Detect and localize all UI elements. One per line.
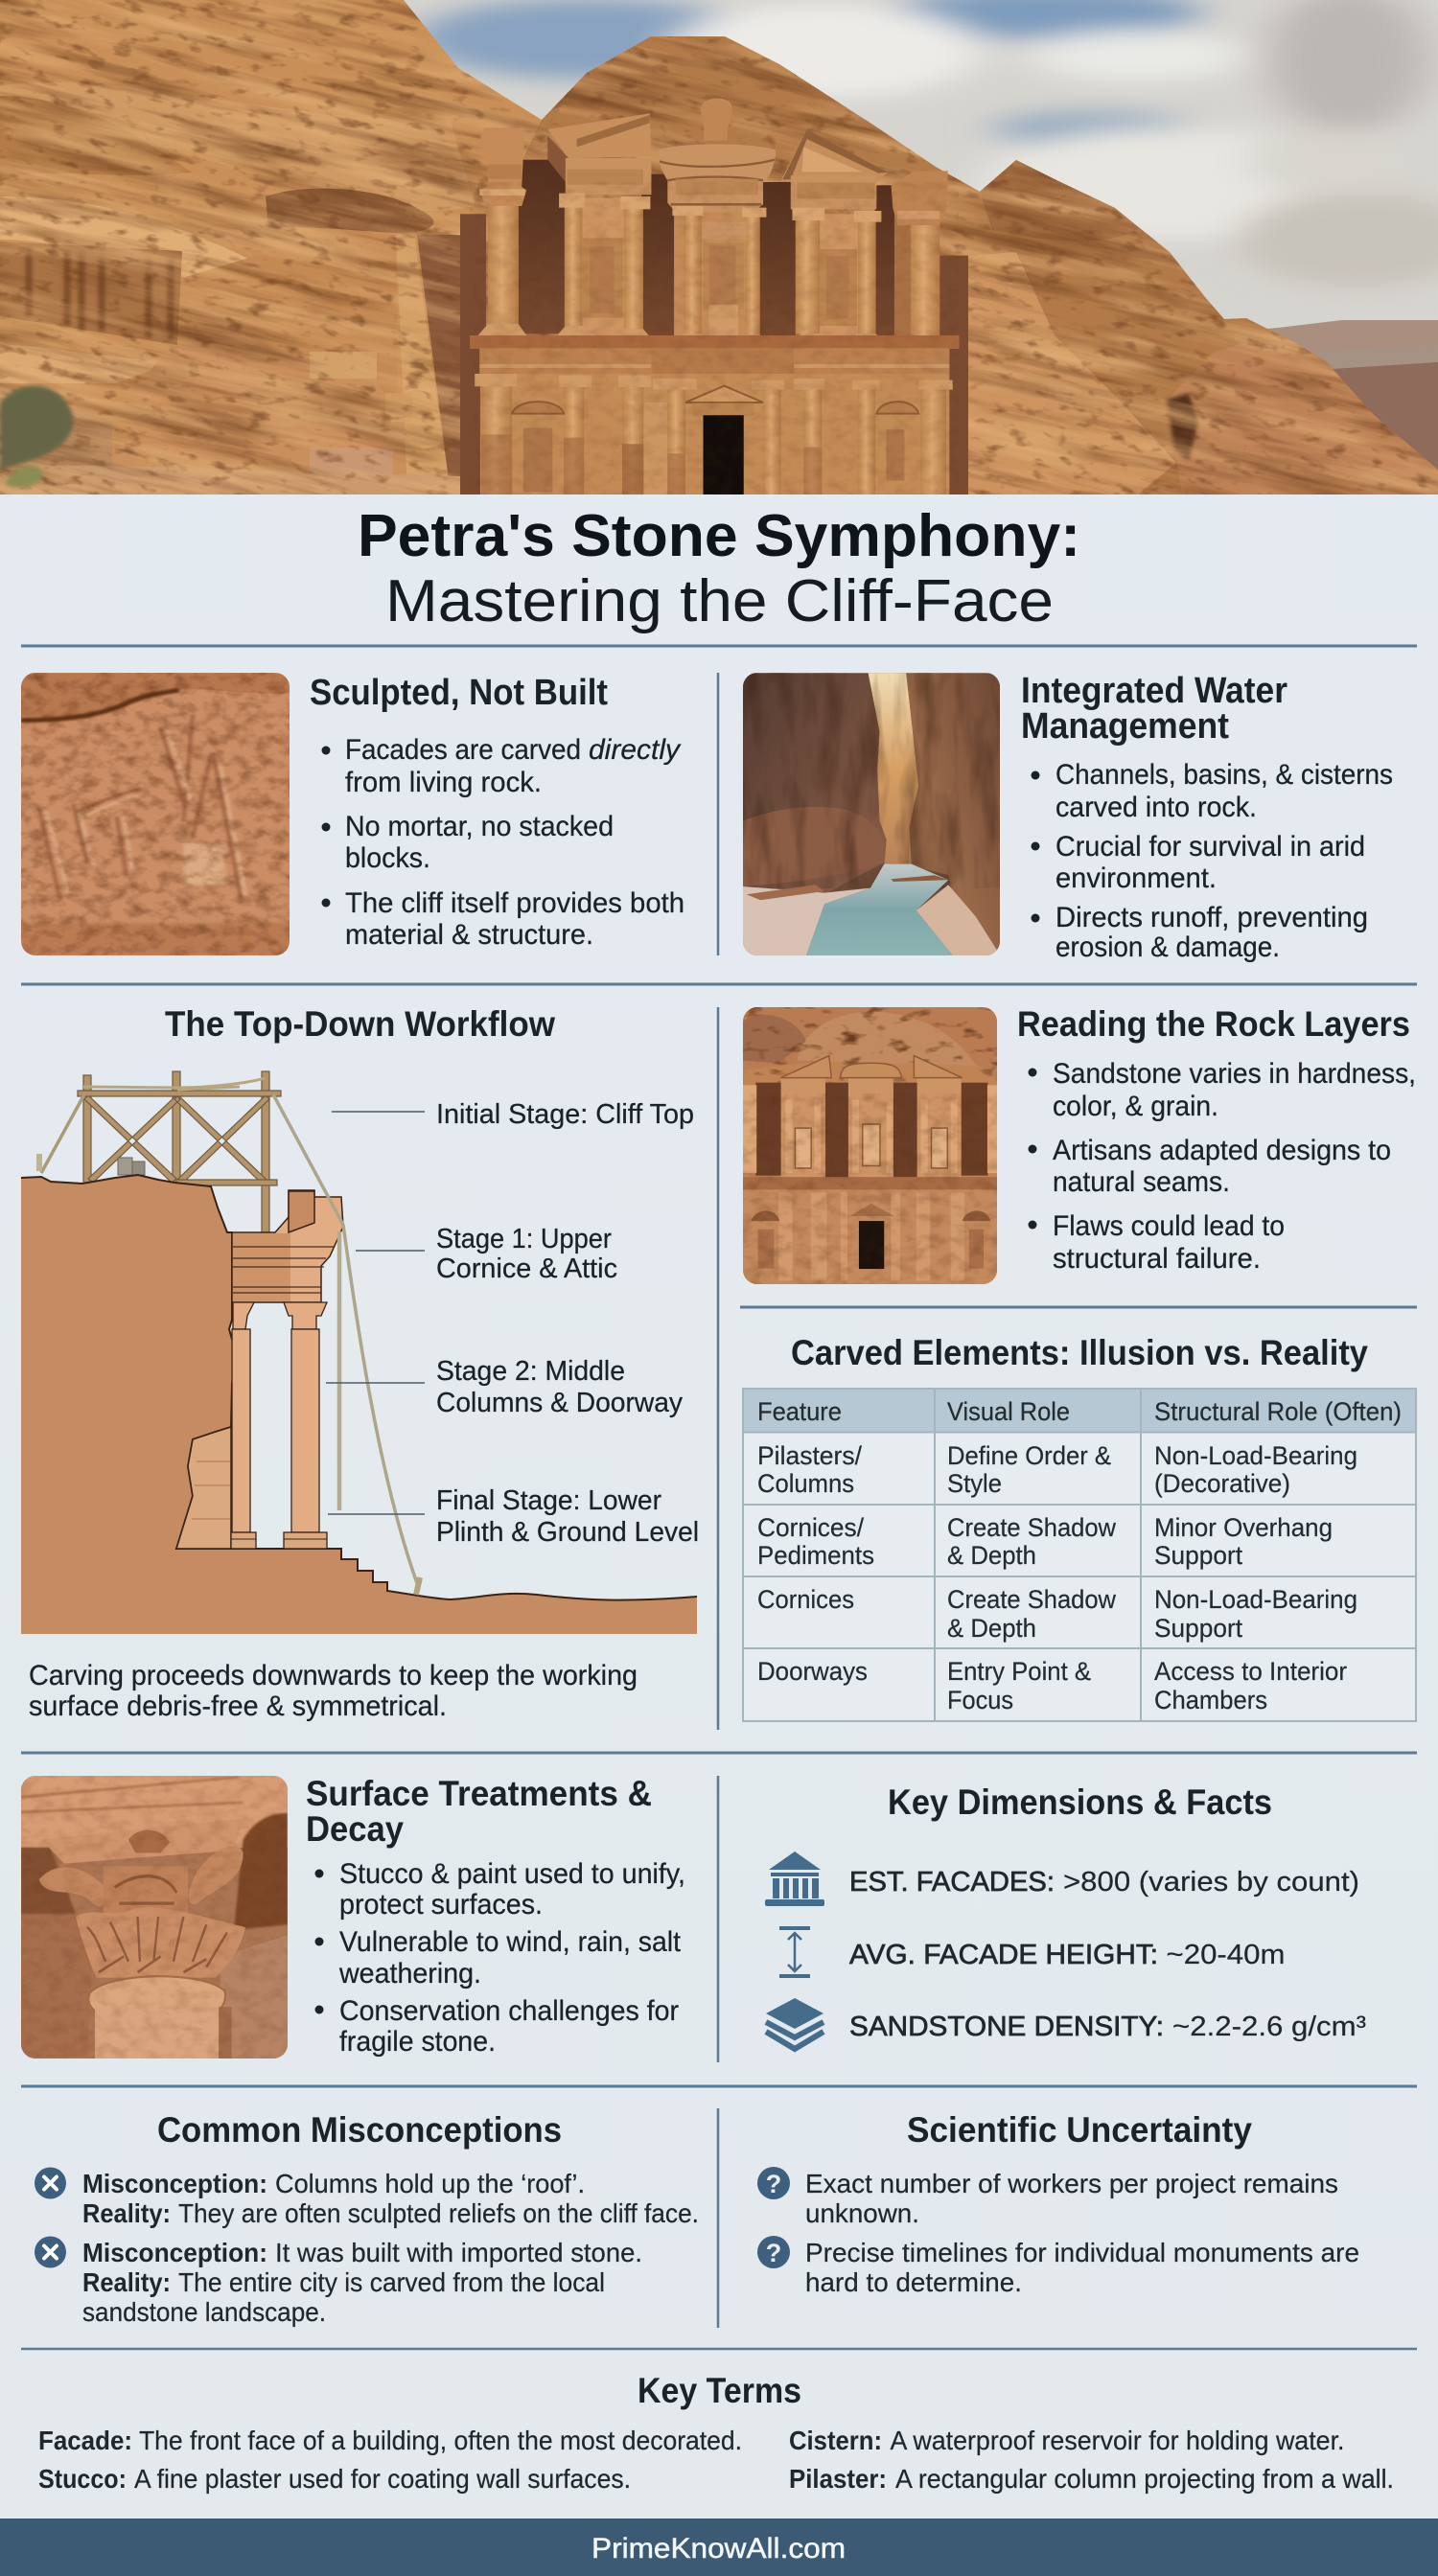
bullets xyxy=(322,734,684,951)
diagram: cliff cross-section with scaffold xyxy=(21,1071,697,1634)
term: pilaster: Pilaster: xyxy=(789,2464,887,2494)
footer bar xyxy=(0,2518,1438,2576)
lower columns xyxy=(481,385,512,494)
icon: question mark xyxy=(757,2167,790,2199)
heading: Carved Elements: Illusion vs. Reality xyxy=(791,1333,1368,1372)
bullets: natural seams. xyxy=(1053,1166,1230,1198)
panel: surface treatments and decay xyxy=(21,1774,685,2059)
uncertainty two: Precise timelines for individual monuments are xyxy=(805,2238,1359,2267)
bullets: Vulnerable to wind, rain, salt xyxy=(339,1926,682,1958)
bullets: Channels, basins, & cisterns xyxy=(1055,759,1393,791)
panel: carved elements table xyxy=(743,1333,1416,1721)
table: Doorways xyxy=(757,1657,868,1686)
panel: scientific uncertainty xyxy=(757,2110,1359,2297)
stage labels: Stage 2: Middle xyxy=(436,1356,625,1387)
panel: reading the rock layers xyxy=(743,1004,1416,1285)
bullets: color, & grain. xyxy=(1053,1091,1218,1122)
term: cistern: Cistern: xyxy=(789,2426,882,2455)
term: facade: Facade: xyxy=(38,2426,132,2455)
table: Chambers xyxy=(1154,1686,1267,1714)
bullets: blocks. xyxy=(345,842,430,874)
table: Entry Point & xyxy=(947,1657,1091,1686)
table: Access to Interior xyxy=(1154,1657,1347,1686)
fact: sandstone density xyxy=(849,2012,1366,2042)
fact: average facade height: AVG. FACADE HEIGHT: xyxy=(849,1940,1158,1970)
stage labels: Final Stage: Lower xyxy=(436,1485,661,1516)
bullets: weathering. xyxy=(338,1958,481,1990)
table: Pilasters/ xyxy=(757,1441,862,1470)
distant hills xyxy=(1267,320,1438,369)
misconception one: Misconception: xyxy=(82,2169,267,2198)
photo: corinthian capital xyxy=(21,1776,288,2059)
fact: estimated facades: EST. FACADES: xyxy=(849,1867,1055,1898)
misconception two: Misconception: xyxy=(82,2238,267,2267)
upper storey walls xyxy=(580,198,625,335)
table: Minor Overhang xyxy=(1154,1513,1333,1542)
term: stucco: Stucco: xyxy=(38,2464,127,2494)
bullets: structural failure. xyxy=(1053,1243,1261,1275)
bullets xyxy=(1028,1058,1416,1275)
caption: Carving proceeds downwards to keep the working xyxy=(29,1660,638,1691)
icon: question mark xyxy=(757,2236,790,2268)
heading: The Top-Down Workflow xyxy=(165,1004,555,1044)
heading: Management xyxy=(1021,706,1229,747)
term: pilaster: A rectangular column projecting from a wall. xyxy=(895,2464,1394,2494)
misconception one: They are often sculpted reliefs on the cliff face. xyxy=(178,2198,699,2228)
icon: temple xyxy=(765,1852,824,1906)
panel: sculpted, not built xyxy=(21,673,684,955)
table: Support xyxy=(1154,1541,1242,1570)
bullets: The cliff itself provides both xyxy=(345,887,684,919)
shadow recesses xyxy=(460,214,486,495)
uncertainty two xyxy=(805,2238,1359,2297)
bullets: Crucial for survival in arid xyxy=(1055,831,1365,862)
table: Support xyxy=(1154,1614,1242,1643)
table: (Decorative) xyxy=(1154,1469,1290,1498)
caption xyxy=(29,1660,638,1722)
misconception two: The entire city is carved from the local xyxy=(178,2267,605,2297)
bullets: Stucco & paint used to unify, xyxy=(339,1858,685,1890)
bullets xyxy=(314,1858,685,2058)
icon: question mark: ? xyxy=(766,2170,781,2198)
photo: canyon water channel xyxy=(743,673,1001,955)
fact: sandstone density: SANDSTONE DENSITY: xyxy=(849,2012,1164,2042)
table: Columns xyxy=(757,1469,854,1498)
heading: Scientific Uncertainty xyxy=(907,2110,1252,2150)
door and niches xyxy=(685,386,763,402)
stage labels: Cornice & Attic xyxy=(436,1254,617,1284)
table xyxy=(743,1389,1416,1721)
misconception one: Columns hold up the ‘roof’. xyxy=(275,2169,585,2198)
outer right capital xyxy=(892,171,948,225)
table: Cornices xyxy=(757,1585,854,1614)
table: Create Shadow xyxy=(947,1513,1116,1542)
heading xyxy=(1021,671,1287,747)
table: Focus xyxy=(947,1686,1013,1714)
term: cistern: A waterproof reservoir for holding water. xyxy=(890,2426,1344,2455)
bullets: environment. xyxy=(1055,862,1217,894)
fact: sandstone density: ~2.2-2.6 g/cm³ xyxy=(1172,2012,1366,2042)
bullets: material & structure. xyxy=(345,919,593,951)
facade carving xyxy=(460,98,968,495)
bullets: Flaws could lead to xyxy=(1053,1210,1285,1242)
table: Style xyxy=(947,1469,1002,1498)
bullets: Artisans adapted designs to xyxy=(1053,1135,1391,1166)
title xyxy=(358,503,1080,634)
hero photo: Petra monastery facade xyxy=(0,0,1438,494)
entablature xyxy=(470,335,960,349)
panel: key terms xyxy=(38,2371,1394,2494)
stage labels xyxy=(326,1099,699,1548)
bullets: Conservation challenges for xyxy=(339,1995,679,2027)
fact: average facade height: ~20-40m xyxy=(1166,1940,1285,1970)
misconception one xyxy=(82,2169,699,2228)
misconception two xyxy=(82,2238,642,2327)
rock masses xyxy=(460,36,1438,494)
table: Non-Load-Bearing xyxy=(1154,1441,1357,1470)
stage labels: Stage 1: Upper xyxy=(436,1224,612,1254)
table: Feature xyxy=(757,1397,842,1426)
table: Non-Load-Bearing xyxy=(1154,1585,1357,1614)
heading: Decay xyxy=(306,1809,404,1849)
panel: the top-down workflow xyxy=(21,1004,699,1722)
bullets: protect surfaces. xyxy=(339,1889,543,1920)
icon: stacked layers xyxy=(766,1998,823,2049)
bullets: No mortar, no stacked xyxy=(345,811,614,842)
heading: Common Misconceptions xyxy=(157,2110,562,2150)
icon: x mark xyxy=(35,2237,66,2267)
heading xyxy=(306,1774,652,1849)
heading: Key Dimensions & Facts xyxy=(888,1782,1272,1822)
table: Cornices/ xyxy=(757,1513,864,1542)
title: Mastering the Cliff-Face xyxy=(385,568,1054,634)
bullets: from living rock. xyxy=(345,767,542,798)
heading: Key Terms xyxy=(638,2371,801,2410)
outer left capital xyxy=(478,127,526,206)
stage labels: Initial Stage: Cliff Top xyxy=(436,1099,694,1130)
misconception two: It was built with imported stone. xyxy=(275,2238,642,2267)
misconception two: Reality: xyxy=(82,2267,171,2297)
table: Pediments xyxy=(757,1541,874,1570)
panel: key dimensions and facts xyxy=(765,1782,1366,2049)
misconception one: Reality: xyxy=(82,2198,171,2228)
column bases xyxy=(477,324,878,335)
panel: common misconceptions xyxy=(35,2110,699,2327)
lower storey wall xyxy=(480,374,949,494)
fact: average facade height xyxy=(849,1940,1285,1970)
uncertainty two: hard to determine. xyxy=(805,2267,1022,2297)
bullets: erosion & damage. xyxy=(1055,932,1280,963)
title: Petra's Stone Symphony: xyxy=(358,503,1080,569)
stage labels: Plinth & Ground Level xyxy=(436,1517,699,1548)
bullets: Directs runoff, preventing xyxy=(1055,902,1368,933)
windows xyxy=(583,238,623,318)
right pavilion xyxy=(781,129,888,182)
central tholos xyxy=(701,98,732,141)
uncertainty one: unknown. xyxy=(805,2198,919,2228)
bullets xyxy=(1032,759,1393,963)
panel: integrated water management xyxy=(743,671,1393,963)
fact: estimated facades: >800 (varies by count) xyxy=(1063,1867,1359,1898)
fact: estimated facades xyxy=(849,1867,1359,1898)
uncertainty one: Exact number of workers per project remains xyxy=(805,2169,1338,2198)
table: Structural Role (Often) xyxy=(1154,1397,1402,1426)
table: & Depth xyxy=(947,1541,1036,1570)
table: Define Order & xyxy=(947,1441,1111,1470)
table: Create Shadow xyxy=(947,1585,1116,1614)
stage labels: Columns & Doorway xyxy=(436,1388,683,1418)
uncertainty one xyxy=(805,2169,1338,2228)
bullets: Facades are carved xyxy=(345,734,581,766)
icon: x mark xyxy=(35,2168,66,2198)
photo: carved sandstone xyxy=(21,673,291,955)
heading: Sculpted, Not Built xyxy=(310,673,608,713)
heading: Surface Treatments & xyxy=(306,1774,652,1813)
misconception two: sandstone landscape. xyxy=(82,2297,326,2327)
footer bar: PrimeKnowAll.com xyxy=(591,2533,846,2564)
heading: Integrated Water xyxy=(1021,671,1287,711)
left pavilion xyxy=(547,113,651,158)
bullets: carved into rock. xyxy=(1055,792,1257,823)
photo: facade detail xyxy=(743,1007,998,1285)
term: stucco: A fine plaster used for coating wall surfaces. xyxy=(134,2464,631,2494)
caption: surface debris-free & symmetrical. xyxy=(29,1690,447,1722)
bullets: fragile stone. xyxy=(339,2026,496,2058)
table: Visual Role xyxy=(947,1397,1070,1426)
table: & Depth xyxy=(947,1614,1036,1643)
icon: height arrows xyxy=(779,1928,810,1976)
icon: question mark: ? xyxy=(766,2239,781,2267)
term: facade: The front face of a building, often the most decorated. xyxy=(139,2426,742,2455)
bush xyxy=(0,385,73,488)
upper columns xyxy=(488,204,519,328)
bullets: Sandstone varies in hardness, xyxy=(1053,1058,1416,1090)
bullets: directly xyxy=(589,734,682,766)
heading: Reading the Rock Layers xyxy=(1017,1004,1410,1044)
rock strata texture xyxy=(0,0,1438,494)
